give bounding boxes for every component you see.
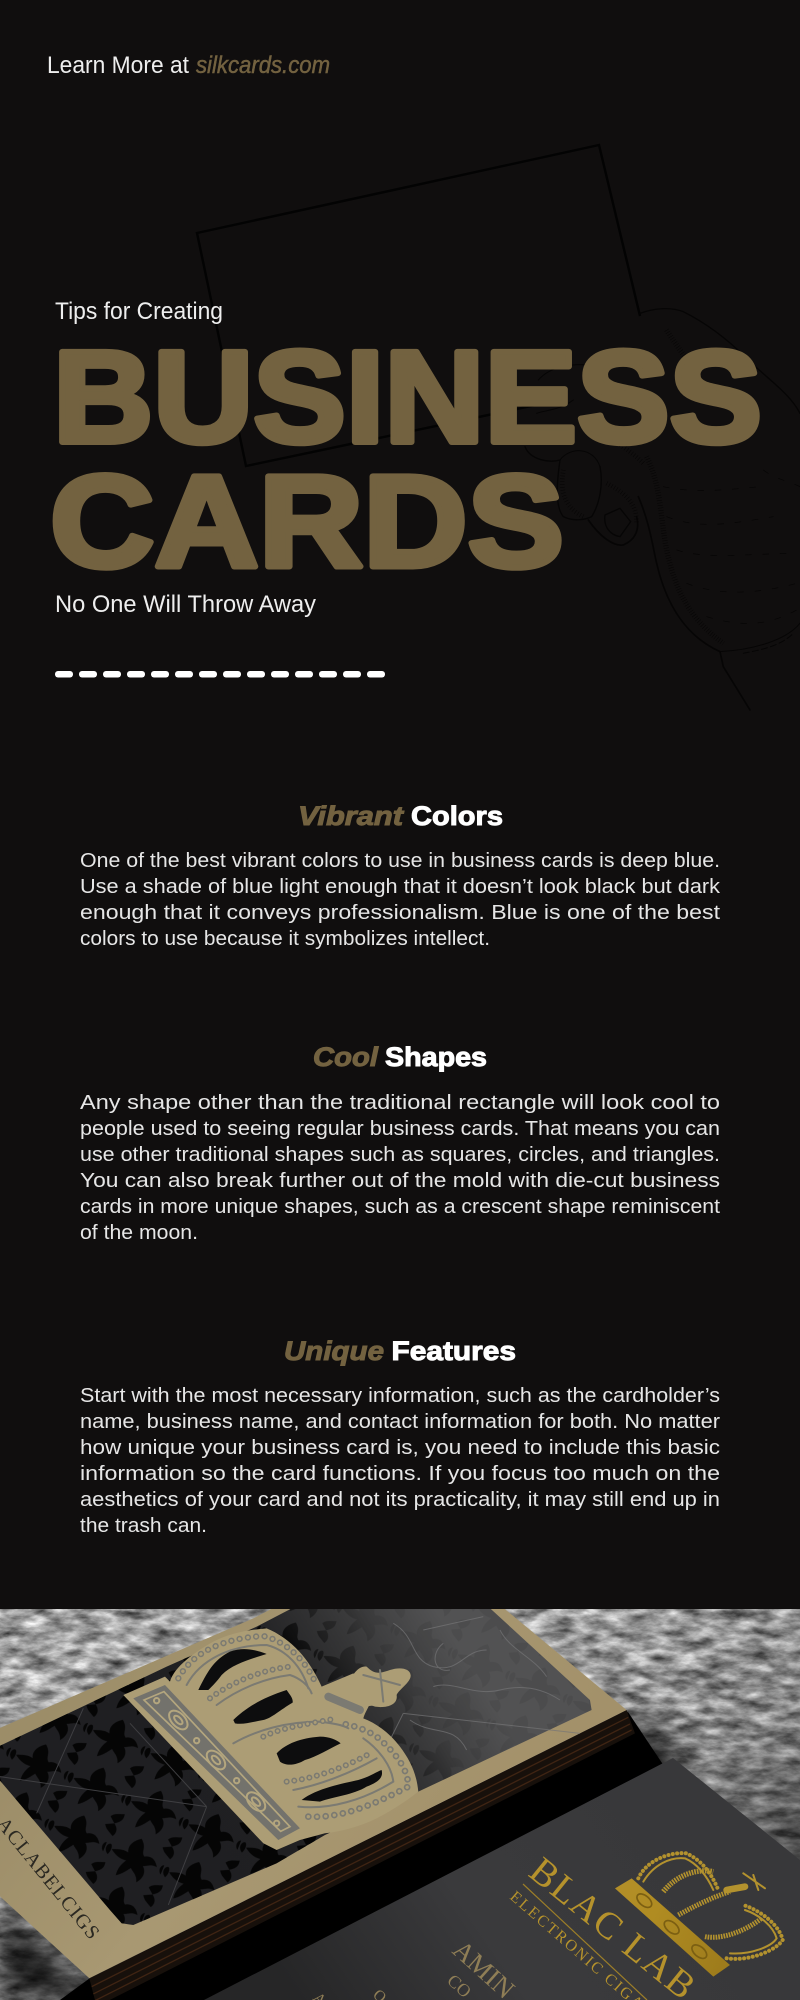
link: learn more xyxy=(47,52,330,79)
dark card base xyxy=(204,1758,800,2000)
heading: unique features: Features xyxy=(392,1336,516,1366)
illustration: hand holding blank card xyxy=(197,145,800,710)
damask pattern xyxy=(0,1609,451,1924)
heading: unique features: Unique xyxy=(284,1336,384,1366)
card stack edges xyxy=(89,1710,635,2000)
heading: vibrant colors: Vibrant xyxy=(298,801,404,831)
section: vibrant colors xyxy=(80,801,721,950)
photo: luxury business cards xyxy=(0,1597,800,2000)
embossed flourishes xyxy=(390,1617,580,1750)
illustration: card outline xyxy=(197,145,640,466)
body text: unique features: Start with the most necessary information, such as the cardholder’s xyxy=(80,1385,720,1407)
section: unique features xyxy=(80,1336,720,1537)
heading: cool shapes: Cool xyxy=(313,1042,379,1072)
section: cool shapes xyxy=(80,1042,720,1244)
die-cut window xyxy=(0,1607,592,1925)
heading: unique features xyxy=(284,1336,516,1366)
crown arches xyxy=(187,1645,400,1807)
photo: shadow below card stack xyxy=(0,1712,690,2000)
gold foil crown xyxy=(615,1853,783,1977)
crown cut-outs xyxy=(198,1649,382,1802)
subtitle: tips for creating: Tips for Creating xyxy=(55,298,223,325)
heading: cool shapes: Shapes xyxy=(385,1042,487,1072)
body text: unique features: name, business name, and contact information for both. No matter xyxy=(80,1411,720,1433)
heading: cool shapes xyxy=(313,1042,487,1072)
title: business cards: BUSINESS xyxy=(53,323,762,470)
heading: vibrant colors xyxy=(298,801,503,831)
kraft frame xyxy=(0,1597,627,1978)
body text: vibrant colors: enough that it conveys professionalism. Blue is one of the best xyxy=(80,902,721,924)
body text: cool shapes: You can also break further out of the mold with die-cut business xyxy=(80,1170,720,1192)
body text: cool shapes: cards in more unique shapes, such as a crescent shape reminiscent xyxy=(80,1196,720,1218)
heading: vibrant colors: Colors xyxy=(411,801,503,831)
body text: vibrant colors: colors to use because it symbolizes intellect. xyxy=(80,928,490,950)
link: learn more: Learn More at xyxy=(47,52,189,79)
body text: cool shapes xyxy=(80,1092,720,1244)
die-cut crown xyxy=(123,1628,418,1850)
photo: dark business card xyxy=(204,1758,800,2000)
body text: unique features: aesthetics of your card and not its practicality, it may still end up in xyxy=(80,1489,720,1511)
crown finial xyxy=(354,1666,411,1708)
body text: unique features: how unique your business card is, you need to include this basic xyxy=(80,1437,720,1459)
crown band xyxy=(133,1685,300,1840)
body text: vibrant colors: Use a shade of blue light enough that it doesn’t look black but dark xyxy=(80,876,721,898)
body text: vibrant colors xyxy=(80,850,721,950)
body text: vibrant colors: One of the best vibrant colors to use in business cards is deep blue. xyxy=(80,850,720,872)
body text: unique features xyxy=(80,1385,720,1537)
printed name xyxy=(312,1944,516,2000)
photo: surface shading xyxy=(0,1609,800,2000)
subtitle: no one will throw away: No One Will Throw Away xyxy=(55,591,316,618)
illustration: hand line art xyxy=(525,309,800,710)
title: business cards xyxy=(50,323,762,594)
photo: stack of kraft cards xyxy=(0,1597,635,2000)
body text: cool shapes: people used to seeing regular business cards. That means you can xyxy=(80,1118,720,1140)
dashed divider xyxy=(55,671,385,678)
body text: unique features: information so the card functions. If you focus too much on the xyxy=(80,1463,720,1485)
photo: textured surface xyxy=(0,1609,800,2000)
body text: cool shapes: use other traditional shapes such as squares, circles, and triangles. xyxy=(80,1144,720,1166)
body text: cool shapes: of the moon. xyxy=(80,1222,198,1244)
body text: cool shapes: Any shape other than the traditional rectangle will look cool to xyxy=(80,1092,720,1114)
link: learn more: silkcards.com xyxy=(196,52,330,79)
title: business cards: CARDS xyxy=(50,448,564,594)
body text: unique features: the trash can. xyxy=(80,1515,207,1537)
diamond lattice lines xyxy=(0,1708,207,1905)
crown beads xyxy=(178,1636,408,1817)
